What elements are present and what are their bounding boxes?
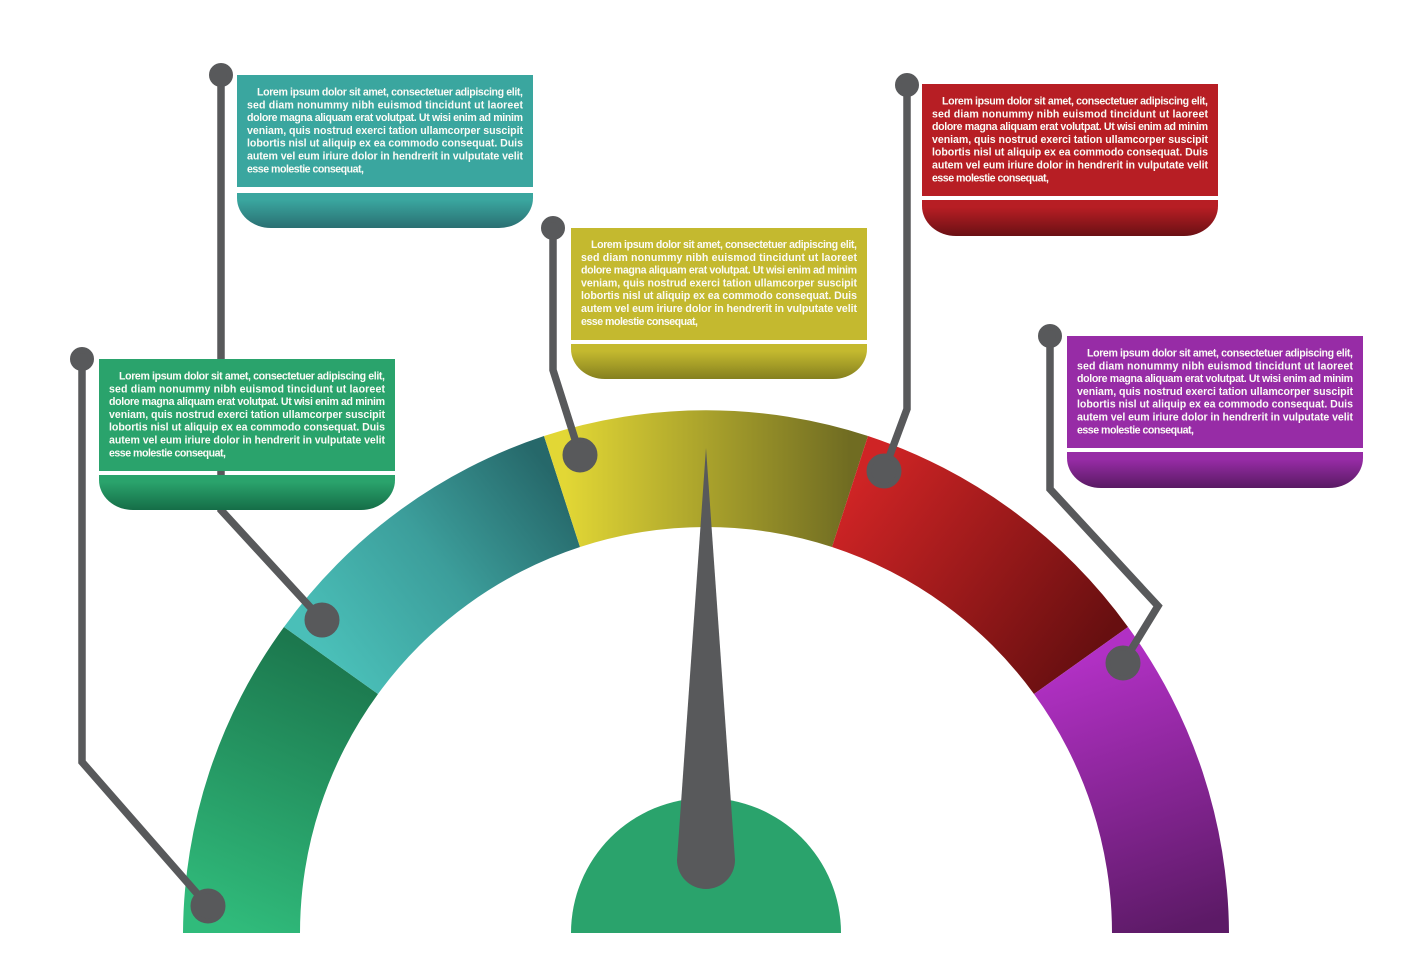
panel text: lobortis nisl ut aliquip ex ea commodo consequat. Duis [1077, 399, 1353, 411]
panel text: veniam, quis nostrud exerci tation ullamcorper suscipit [1077, 386, 1353, 398]
gauge segment: green [183, 627, 378, 933]
panel body [1067, 336, 1363, 448]
gauge segment: yellow [544, 410, 868, 547]
panel footer band [922, 200, 1218, 236]
panel text [932, 96, 1208, 184]
panel text: sed diam nonummy nibh euismod tincidunt ut laoreet [932, 108, 1208, 120]
panel text: lobortis nisl ut aliquip ex ea commodo consequat. Duis [932, 147, 1208, 159]
panel text: lobortis nisl ut aliquip ex ea commodo consequat. Duis [109, 422, 385, 434]
connector: purple callout [1041, 327, 1158, 678]
panel body [922, 84, 1218, 196]
panel footer band [99, 475, 395, 510]
gauge segment: red [832, 436, 1128, 694]
panel body [237, 75, 533, 187]
panel: purple callout [1067, 336, 1363, 488]
panel text: autem vel eum iriure dolor in hendrerit in vulputate velit [581, 303, 857, 315]
gauge segment: teal [284, 436, 580, 694]
panel text [109, 370, 385, 459]
panel text: veniam, quis nostrud exerci tation ullamcorper suscipit [247, 125, 523, 137]
panel text: Lorem ipsum dolor sit amet, consectetuer adipiscing elit, [942, 96, 1208, 108]
panel text: dolore magna aliquam erat volutpat. Ut wisi enim ad minim [581, 265, 857, 277]
panel text: esse molestie consequat, [109, 447, 226, 459]
panel text: esse molestie consequat, [932, 172, 1049, 184]
gauge hub [571, 798, 841, 933]
panel text: sed diam nonummy nibh euismod tincidunt ut laoreet [1077, 360, 1353, 372]
panel: yellow callout [571, 228, 867, 379]
panel text: esse molestie consequat, [1077, 424, 1194, 436]
panel text: lobortis nisl ut aliquip ex ea commodo consequat. Duis [581, 290, 857, 302]
panel text: dolore magna aliquam erat volutpat. Ut wisi enim ad minim [247, 112, 523, 124]
panel body [571, 228, 867, 340]
gauge needle [677, 448, 735, 889]
connector: yellow callout [544, 219, 595, 470]
panel text: Lorem ipsum dolor sit amet, consectetuer adipiscing elit, [591, 239, 857, 251]
panel text: autem vel eum iriure dolor in hendrerit in vulputate velit [109, 434, 385, 446]
panel text: lobortis nisl ut aliquip ex ea commodo consequat. Duis [247, 138, 523, 150]
panel body [99, 359, 395, 471]
panel text: Lorem ipsum dolor sit amet, consectetuer adipiscing elit, [119, 370, 385, 382]
panel footer band [571, 344, 867, 379]
panel text: dolore magna aliquam erat volutpat. Ut wisi enim ad minim [932, 121, 1208, 133]
panel text: sed diam nonummy nibh euismod tincidunt ut laoreet [109, 383, 385, 395]
panel text: dolore magna aliquam erat volutpat. Ut wisi enim ad minim [109, 396, 385, 408]
gauge segment: purple [1034, 627, 1229, 933]
connector: teal callout [212, 66, 337, 635]
panel text: esse molestie consequat, [581, 316, 698, 328]
panel text: sed diam nonummy nibh euismod tincidunt ut laoreet [581, 252, 857, 264]
panel text: dolore magna aliquam erat volutpat. Ut wisi enim ad minim [1077, 373, 1353, 385]
panel text: Lorem ipsum dolor sit amet, consectetuer adipiscing elit, [1087, 348, 1353, 360]
panel text [581, 239, 857, 328]
panel text [1077, 348, 1353, 436]
panel: teal callout [237, 75, 533, 228]
panel footer band [1067, 452, 1363, 488]
panel text: esse molestie consequat, [247, 163, 364, 175]
panel text: sed diam nonummy nibh euismod tincidunt ut laoreet [247, 99, 523, 111]
panel text: veniam, quis nostrud exerci tation ullamcorper suscipit [581, 277, 857, 289]
panel: green callout [99, 359, 395, 510]
panel footer band [237, 193, 533, 228]
connector: red callout [869, 76, 916, 486]
panel text: autem vel eum iriure dolor in hendrerit in vulputate velit [932, 160, 1208, 172]
gauge arc [183, 410, 1229, 933]
panel text: veniam, quis nostrud exerci tation ullamcorper suscipit [932, 134, 1208, 146]
panel text: Lorem ipsum dolor sit amet, consectetuer adipiscing elit, [257, 86, 523, 98]
panel: red callout [922, 84, 1218, 236]
panel text: veniam, quis nostrud exerci tation ullamcorper suscipit [109, 409, 385, 421]
connector: green callout [73, 350, 223, 921]
panel text: autem vel eum iriure dolor in hendrerit in vulputate velit [1077, 412, 1353, 424]
panel text [247, 86, 523, 175]
panel text: autem vel eum iriure dolor in hendrerit in vulputate velit [247, 150, 523, 162]
